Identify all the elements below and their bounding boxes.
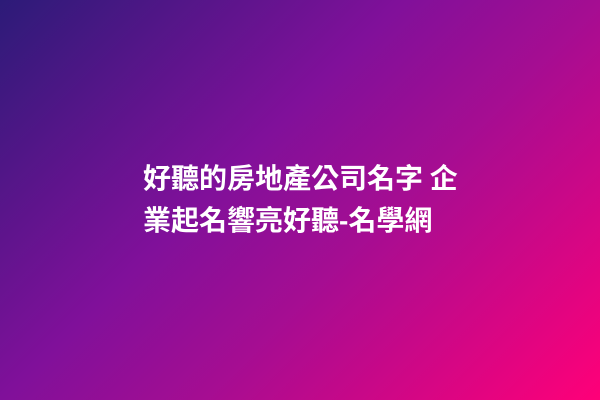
title: 業起名響亮好聽-名學網 — [143, 205, 432, 236]
title: 好聽的房地產公司名字 企 — [143, 163, 458, 194]
title — [143, 163, 458, 236]
